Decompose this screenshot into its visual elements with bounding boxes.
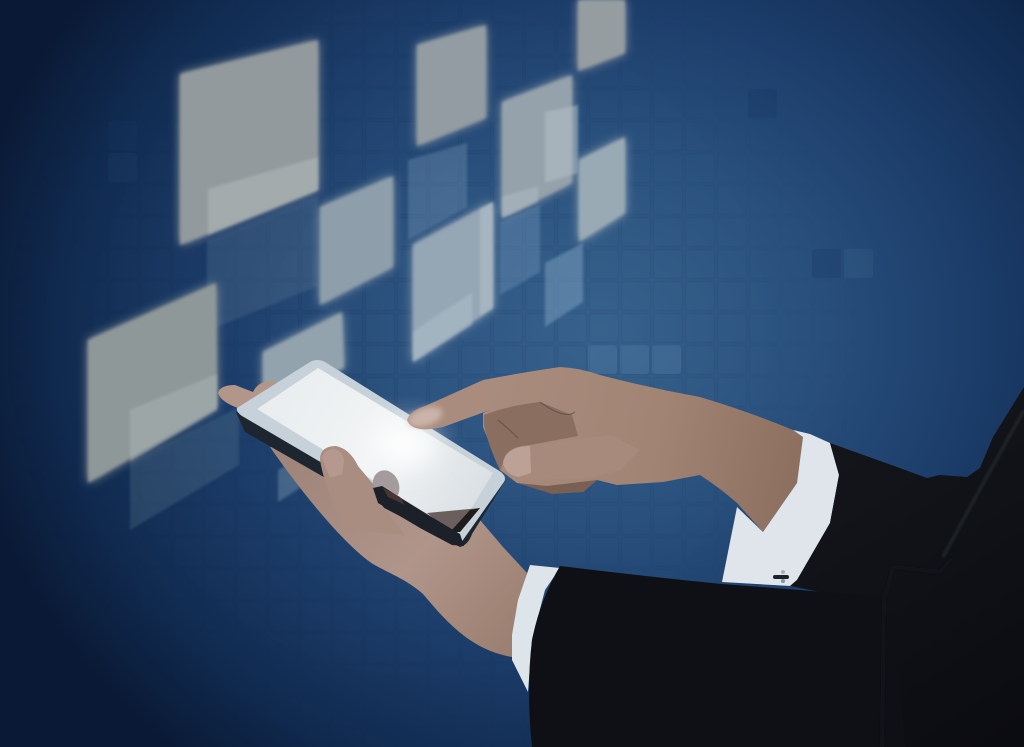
suit: cufflink [773,570,789,583]
panel: top right [578,0,625,71]
right hand: thumbnail [503,446,531,477]
right hand: shaded curled fingers [484,402,578,470]
panel: faint behind left panels [207,196,318,331]
phone: glowing screen [257,368,493,532]
right hand: finger underside [517,480,597,494]
background: highlighted tiles [108,89,873,374]
right hand: outline with index finger, back of hand and wrist [407,367,803,532]
right hand: knuckle crease [498,402,575,438]
phone: silver bezel [237,360,505,542]
panel: small faint below phone left [278,458,300,502]
left hand: fingers behind phone [218,381,285,420]
panel: top middle [417,25,486,146]
right hand [405,367,803,532]
panel: centre reflection [413,293,472,362]
panel: faint behind centre [408,143,467,240]
panel: faint below bottom left [130,407,239,530]
suit: right upper sleeve and torso [790,387,1024,747]
right shirt cuff [722,430,839,586]
suit jacket [512,387,1024,747]
phone: bright spot on screen [375,423,435,467]
right hand: lit fingertip [405,403,445,431]
panel: centre light strip [480,202,493,316]
panel: right middle [579,137,625,242]
panel: small near phone [263,312,344,398]
phone [236,360,505,547]
phone: small reflected finger [383,488,405,505]
right hand: thumb [503,435,640,480]
suit: lapel line at right edge [943,410,1024,557]
suit: pocket flap fold [882,558,952,747]
phone: lower edge beside thumb [373,486,464,546]
panel: middle upper [502,75,572,218]
panel: bottom left reflection [130,374,217,462]
phone: shadow of fingers on screen [427,508,480,532]
left hand: thumb over phone [320,446,405,535]
panel: faint lower middle [500,205,540,295]
suit: left forearm sleeve [529,566,905,747]
panel: overlay strip [545,105,578,183]
panel: reflection in top left [208,157,318,235]
left hand: palm [270,440,527,657]
phone: finger reflection [368,467,404,505]
panel: faint right [545,243,583,327]
floating panels [88,0,625,530]
panel: large bottom left [88,283,217,483]
panel: centre left [320,176,393,305]
panel: lower reflection in middle upper [502,186,538,218]
panel: large top left [180,40,318,245]
left shirt cuff [512,565,560,692]
phone: dark body edge [236,400,505,547]
left hand: thumbnail [322,449,344,478]
phone: dark corner on screen [450,508,480,532]
panel: centre [413,202,493,362]
